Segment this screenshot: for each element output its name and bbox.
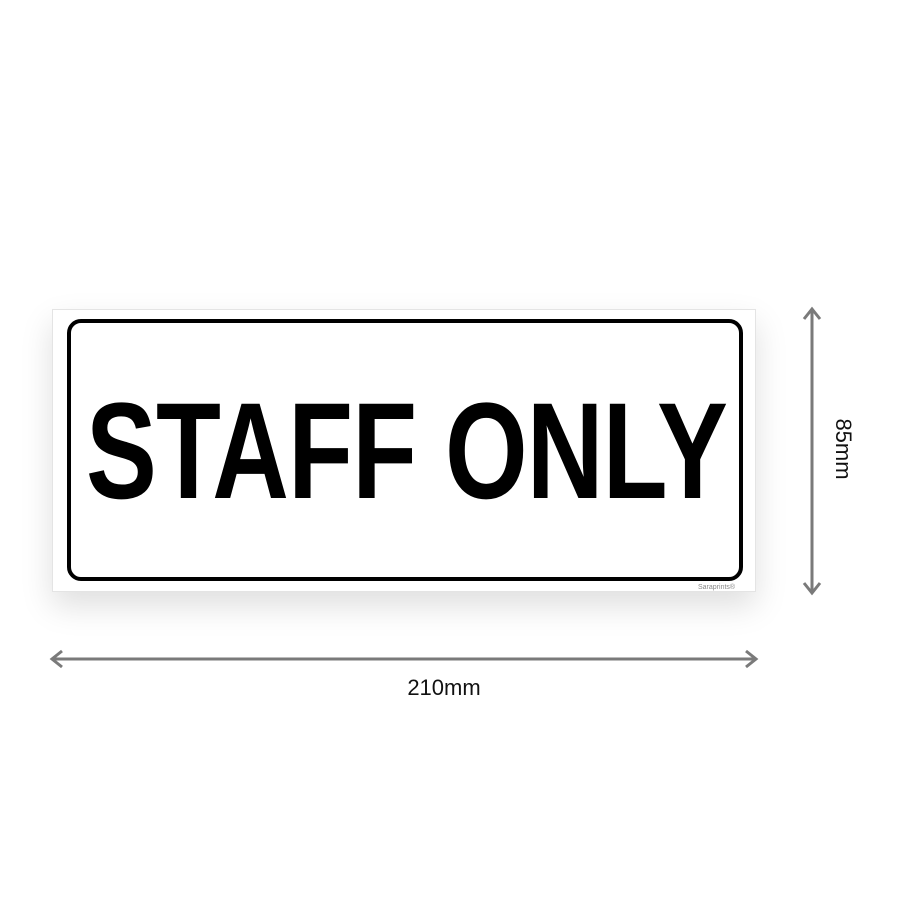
arrow: height bbox=[802, 306, 822, 596]
arrow: width bbox=[50, 650, 758, 668]
label: 85mm: 85mm bbox=[831, 418, 856, 480]
sign text: STAFF ONLY bbox=[86, 375, 727, 528]
label: 210mm: 210mm bbox=[407, 675, 481, 700]
inner border bbox=[67, 319, 743, 581]
brand mark: Saraprints® bbox=[698, 584, 735, 591]
sign panel bbox=[52, 309, 756, 592]
